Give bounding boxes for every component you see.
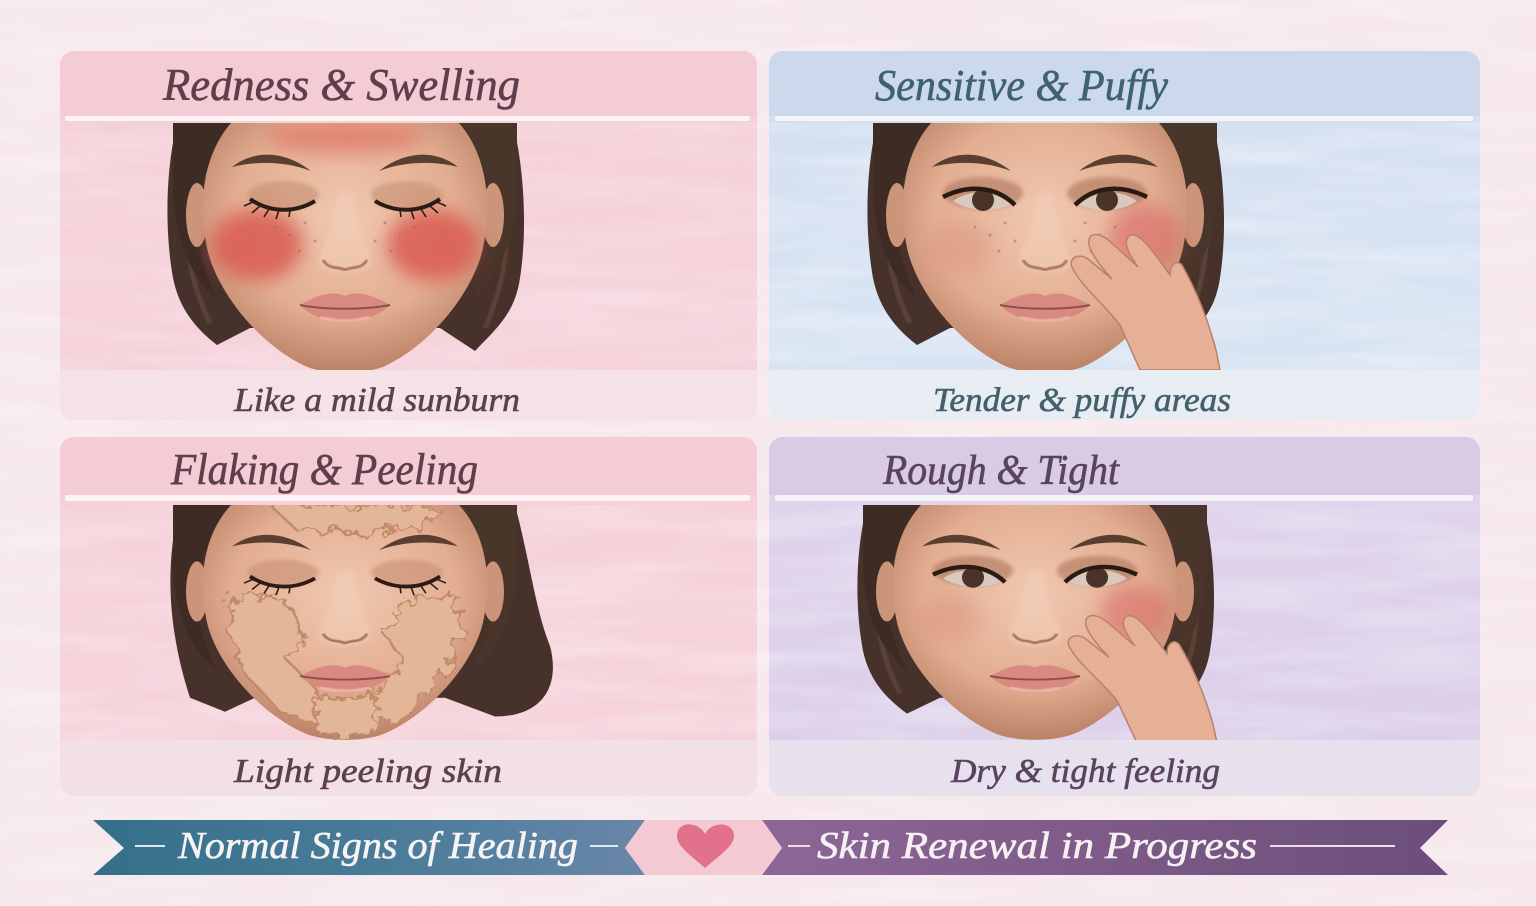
panel: sensitive and puffy <box>769 51 1480 420</box>
banner: left ribbon <box>93 820 645 875</box>
peeling patches <box>229 505 461 735</box>
caption: light peeling skin: Light peeling skin <box>233 753 502 790</box>
caption: like a mild sunburn: Like a mild sunburn <box>233 382 520 419</box>
heading: redness and swelling: Redness & Swelling <box>162 59 520 110</box>
icon: heart <box>677 824 734 868</box>
illustration: face with hand touching cheek <box>867 123 1224 373</box>
panel: rough and tight <box>769 437 1480 796</box>
heading: rough and tight: Rough & Tight <box>882 448 1120 494</box>
banner: center diamond <box>625 820 782 875</box>
banner: right ribbon <box>762 820 1448 875</box>
banner <box>93 820 1448 875</box>
caption: dry and tight feeling: Dry & tight feeling <box>950 753 1220 790</box>
panel: flaking and peeling <box>60 437 757 796</box>
caption: tender and puffy areas: Tender & puffy areas <box>933 382 1231 419</box>
heading: flaking and peeling: Flaking & Peeling <box>170 445 478 494</box>
illustration: face with peeling skin <box>170 505 553 740</box>
panel: redness and swelling <box>60 51 757 420</box>
banner text: skin renewal in progress: Skin Renewal in Progress <box>817 825 1257 867</box>
heading: sensitive and puffy: Sensitive & Puffy <box>875 61 1168 110</box>
illustration: face with red cheeks <box>167 121 524 373</box>
illustration: face looking aside with hand on cheek <box>857 505 1217 743</box>
banner text: normal signs of healing: Normal Signs of Healing <box>177 825 578 867</box>
